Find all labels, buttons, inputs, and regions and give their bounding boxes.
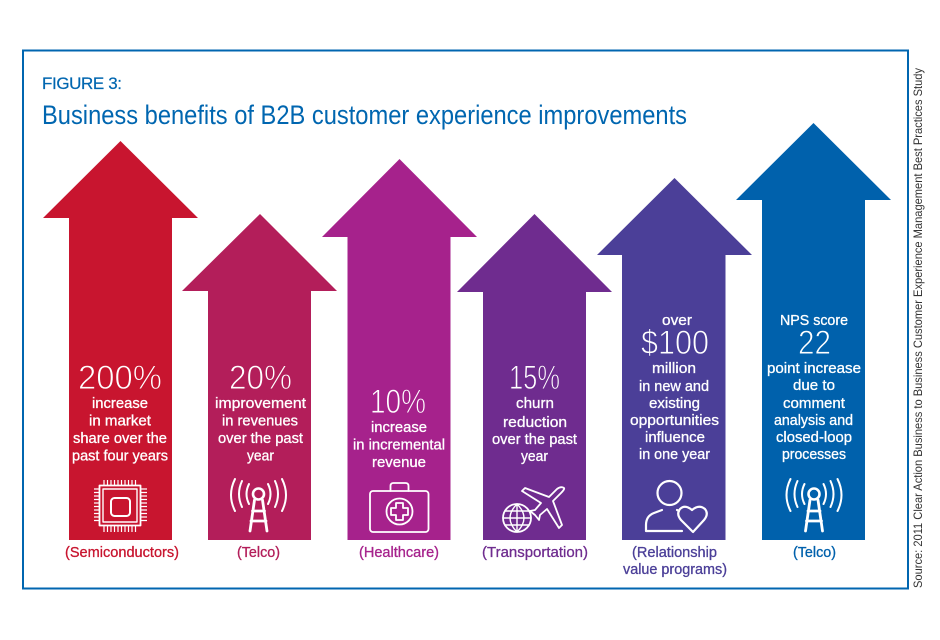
stat text: increase (371, 420, 427, 436)
icon: plane and globe (503, 487, 564, 532)
stat text: 10% (370, 383, 426, 421)
arrow shape (597, 178, 752, 540)
label: relationship value programs (623, 545, 727, 578)
stat text: due to (793, 378, 835, 394)
stat text: NPS score (780, 313, 848, 329)
label: healthcare: (Healthcare) (359, 545, 439, 561)
stat text: year (521, 449, 548, 465)
icon: signal tower (231, 479, 286, 531)
stat text (353, 383, 445, 471)
label: transportation: (Transportation) (482, 545, 588, 561)
panel: transportation arrow (457, 214, 612, 540)
stat text: closed-loop (776, 430, 852, 446)
stat text: revenue (372, 455, 426, 471)
stat text: past four years (72, 448, 168, 464)
source note: Source: 2011 Clear Action Business to Business Customer Experience Management Best Practices Study (911, 68, 925, 588)
stat text: 200% (78, 359, 162, 397)
panel: NPS telco arrow (736, 123, 891, 540)
stat text: in one year (639, 447, 710, 463)
stat text (492, 359, 577, 465)
stat text: over the past (492, 432, 577, 448)
stat text: comment (783, 396, 845, 412)
stat text: in new and (639, 379, 709, 395)
arrow shape (736, 123, 891, 540)
stat text: million (652, 361, 696, 377)
icon: chip (94, 480, 147, 532)
icon: signal tower (786, 479, 842, 531)
stat text: in market (89, 414, 151, 430)
stat text: 20% (229, 359, 292, 397)
panel: healthcare arrow (322, 159, 477, 540)
stat text: over the past (218, 431, 303, 447)
label: telco: (Telco) (793, 545, 836, 561)
stat text: analysis and (774, 413, 853, 429)
stat text: 22 (798, 324, 831, 362)
label: relationship value programs: value programs) (623, 562, 727, 578)
arrow shape (457, 214, 612, 540)
label: semiconductors: (Semiconductors) (65, 545, 179, 561)
stat text (630, 313, 719, 463)
frame (23, 50, 908, 588)
arrow shape (322, 159, 477, 540)
title: Business benefits of B2B customer experience improvements (42, 100, 687, 130)
panel: semiconductors arrow (43, 141, 198, 540)
stat text: influence (645, 430, 705, 446)
icon: medical kit (370, 483, 428, 532)
stat text: processes (782, 447, 846, 463)
stat text: existing (649, 396, 700, 412)
stat text: improvement (215, 396, 306, 412)
stat text: year (247, 448, 274, 464)
arrow shape (43, 141, 198, 540)
panel: telco arrow (182, 214, 337, 540)
stat text: in revenues (222, 414, 298, 430)
figure label: FIGURE 3: (42, 74, 122, 93)
stat text: share over the (73, 431, 167, 447)
stat text (767, 313, 861, 463)
stat text: increase (92, 396, 148, 412)
stat text: over (662, 313, 692, 329)
icon: person with heart (646, 481, 707, 532)
stat text: reduction (503, 415, 567, 431)
panel: relationship value arrow (597, 178, 752, 540)
stat text: churn (516, 396, 554, 412)
label: relationship value programs: (Relationship (632, 545, 717, 561)
arrow shape (182, 214, 337, 540)
stat text: in incremental (353, 438, 445, 454)
stat text: 15% (509, 359, 560, 397)
stat text (72, 359, 168, 464)
stat text: $100 (641, 324, 709, 362)
stat text (215, 359, 306, 464)
stat text: point increase (767, 361, 861, 377)
stat text: opportunities (630, 413, 719, 429)
label: telco: (Telco) (237, 545, 280, 561)
